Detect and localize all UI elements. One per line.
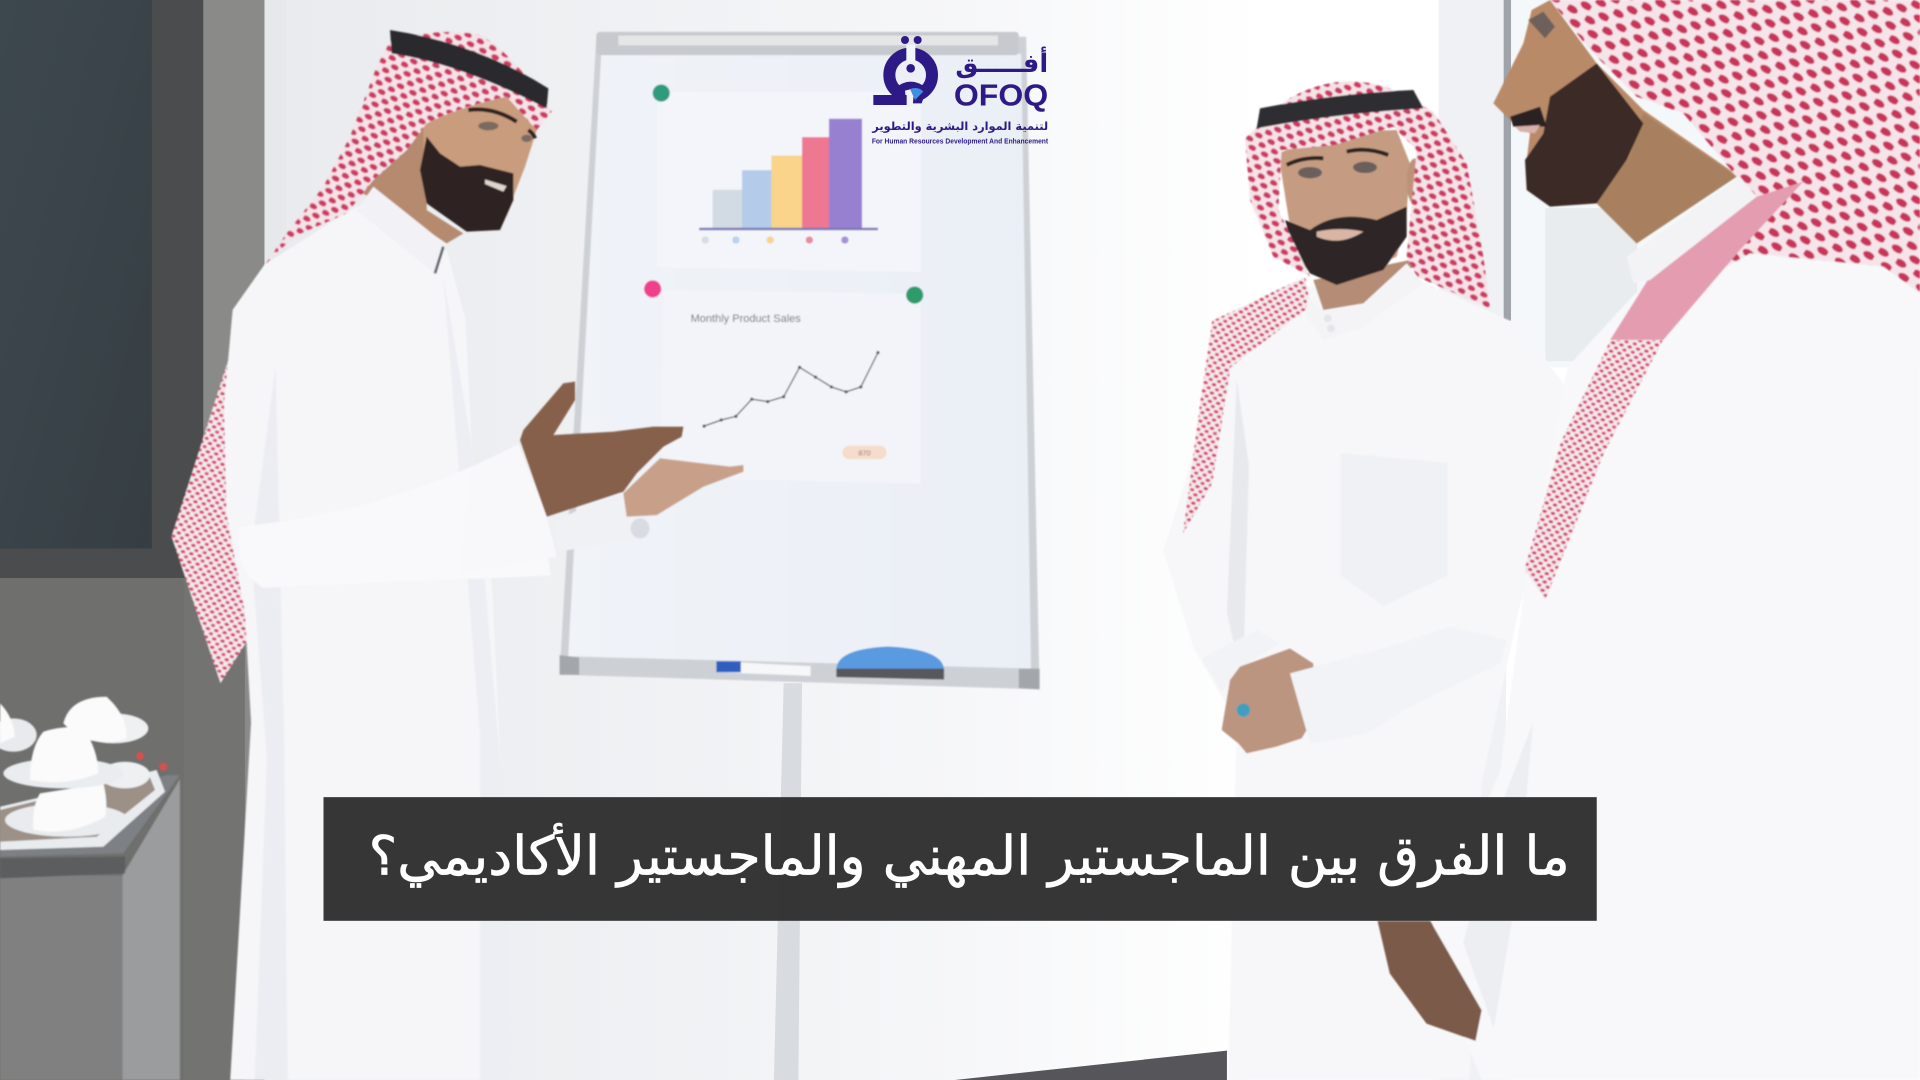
logo — [871, 36, 1049, 145]
eye — [1528, 12, 1555, 38]
lower-left drape — [1183, 277, 1310, 534]
mouth — [485, 179, 507, 192]
headscarf — [1550, 0, 1920, 293]
moustache and lip — [1510, 107, 1547, 127]
title text: ما الفرق بين الماجستير المهني والماجستير الأكاديمي؟ — [369, 822, 1570, 887]
face and neck — [1493, 0, 1737, 243]
paper: line chart — [661, 290, 921, 484]
eyes — [1287, 150, 1388, 165]
lower shemagh drape — [171, 361, 251, 683]
logo English tagline: For Human Resources Development And Enhancement — [872, 136, 1049, 145]
cups — [78, 713, 148, 743]
agal — [1257, 90, 1423, 128]
headscarf — [265, 32, 552, 265]
headscarf — [1245, 81, 1490, 308]
collar — [1627, 177, 1757, 283]
mouth — [1317, 229, 1363, 241]
logo Arabic tagline: لتنمية الموارد البشرية والتطوير — [871, 119, 1048, 133]
hand — [1378, 921, 1482, 1041]
clasped hands and cuffs, traced — [1202, 627, 1507, 753]
man in the middle — [1163, 81, 1580, 1080]
agal — [390, 30, 548, 108]
head, traced — [1245, 81, 1490, 340]
eyes — [468, 109, 535, 138]
beard — [1285, 207, 1407, 285]
hands and cuffs, traced — [460, 382, 743, 573]
logo Latin name: OFOQ — [954, 78, 1048, 112]
collar — [357, 187, 447, 273]
pink striped border — [1610, 182, 1803, 340]
thobe — [1427, 245, 1920, 1080]
paper: bar chart — [658, 92, 921, 272]
whiteboard stand — [774, 683, 802, 1080]
table — [0, 775, 180, 857]
scarf border, patterned part — [1740, 182, 1920, 293]
paper: line chart: Monthly Product Sales — [691, 313, 801, 325]
logo Arabic name: أفـــــق — [955, 46, 1048, 79]
tea cups on tray — [0, 697, 180, 1080]
head, traced — [265, 30, 552, 273]
upper sleeve — [239, 444, 551, 588]
marker and eraser — [716, 647, 944, 680]
neck — [357, 123, 463, 243]
beard — [1525, 63, 1643, 207]
face — [423, 97, 537, 217]
head, traced — [1493, 0, 1920, 340]
magnets — [644, 84, 923, 304]
thobe — [1163, 276, 1580, 1080]
thobe — [224, 206, 512, 1080]
logo icon — [873, 36, 932, 107]
man on the left presenting — [171, 30, 743, 1080]
collar — [1307, 263, 1423, 340]
face — [1278, 130, 1410, 283]
man on the right — [1378, 0, 1920, 1080]
whiteboard — [560, 32, 1040, 689]
neck — [1313, 260, 1413, 313]
title banner — [323, 797, 1597, 921]
beard — [420, 137, 513, 232]
tray — [0, 770, 165, 850]
scarf strip lower — [1524, 340, 1663, 600]
paper: line chart: 870 — [858, 449, 871, 458]
